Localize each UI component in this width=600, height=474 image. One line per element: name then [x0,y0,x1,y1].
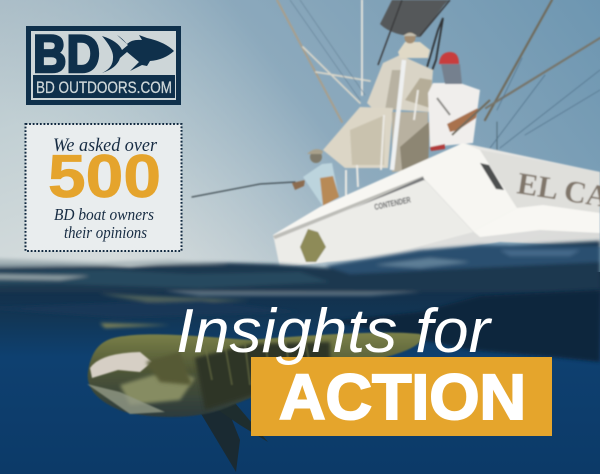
boat [192,0,600,268]
callout line three: their opinions [64,223,147,242]
transom with boat name [480,150,600,214]
action banner: ACTION [279,361,526,433]
callout line one: We asked over [53,135,158,156]
callout line two: BD boat owners [54,205,154,224]
tower [367,55,433,112]
logo letters: BD [33,25,100,84]
underwater hull shadow [330,290,600,362]
mahi mahi fish [87,333,421,472]
logo url [33,75,175,98]
hanging fish [300,229,326,262]
t-top canopy [380,0,449,37]
underwater background [0,272,600,474]
logo fish [102,35,174,73]
fins [200,402,240,472]
hull [273,143,600,268]
sky background [0,0,600,285]
title script: Insights for [176,297,492,366]
cockpit angler [292,149,339,206]
hull logo: CONTENDER [373,194,412,212]
big number: 500 [48,143,161,210]
head detail [90,352,152,378]
flybridge angler [398,42,430,58]
outriggers and fishing lines [192,0,600,197]
canopy shade [323,107,393,168]
survey callout [26,124,182,251]
waterline [0,241,600,328]
logo url: BD OUTDOORS.COM [36,78,172,97]
logo [26,25,181,105]
main angler [428,52,490,151]
tower poles [392,60,404,170]
